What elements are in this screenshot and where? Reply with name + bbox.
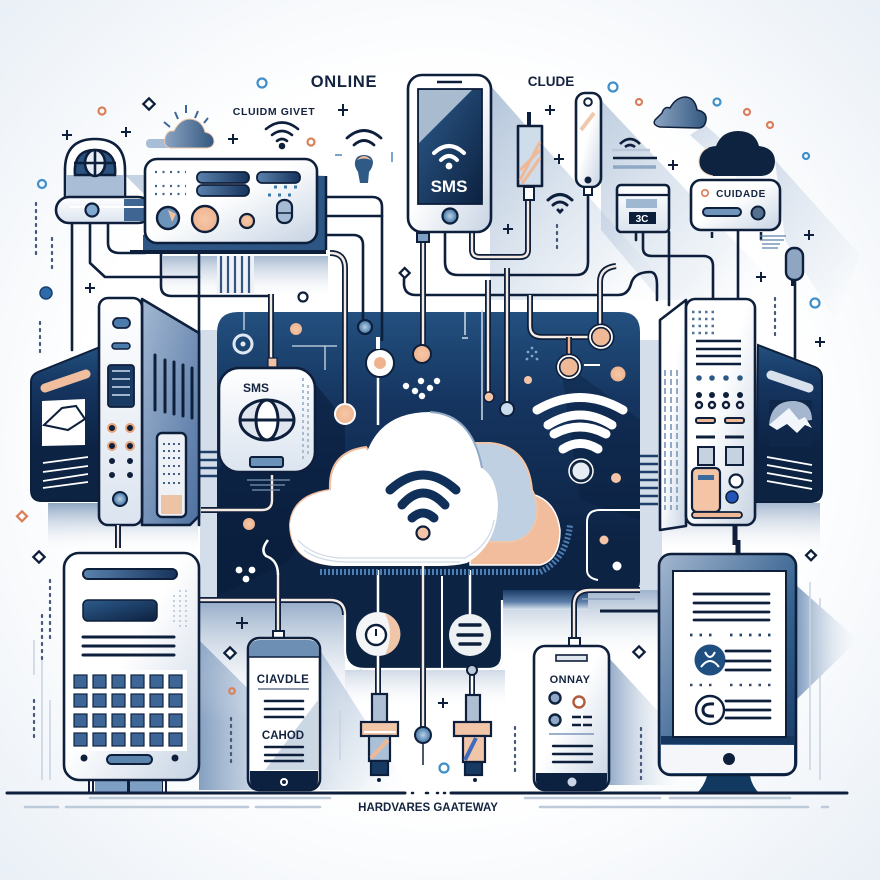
device: main phone [408,75,491,242]
cloud: blue top right [654,97,706,128]
connector: left [356,612,400,782]
decorative dotted lines [34,203,775,780]
device: monitor [659,540,796,793]
wifi icon: large white [537,398,623,483]
text: phone subheading: CAHOD [262,730,304,742]
text: CLUDE: CLUDE [528,74,574,89]
icon: globe [240,400,294,440]
cloud: blue back layer [460,443,537,542]
wifi icon: cloud [390,475,456,518]
decorative plus signs [62,104,825,708]
text: title ONLINE: ONLINE [311,73,377,91]
icon: microphone [786,248,803,286]
text: phone heading: CIAVDLE [257,674,309,686]
baseline [7,793,847,807]
cloud: central white cloud [290,412,498,566]
text: box label: CUIDADE [716,189,766,200]
cloud: peach back layer [470,493,560,565]
device: right server [660,299,755,545]
diagonal long shadows [48,85,860,790]
panel details [217,310,640,669]
device: small display box [617,185,669,232]
device: pendant [576,93,601,195]
device: keypad terminal [64,553,199,793]
icon: wifi on phone [434,146,464,167]
device: top-left globe dome [56,139,151,223]
icon: wifi bulb [335,130,392,183]
icon: monitor ring [696,696,724,724]
device: main control box [130,159,326,252]
node circles on cables [298,292,612,765]
text: phone SMS: SMS [431,177,467,196]
device: cuidade box [691,180,786,248]
cloud dotted halo [320,525,570,572]
device: left server [99,298,199,548]
device: right dark panel [756,345,822,502]
connector: right [449,614,491,782]
wires: light tubes [200,200,659,727]
text: SMS label: SMS [243,381,269,395]
text: HARDVARES GAATEWAY: HARDVARES GAATEWAY [358,802,498,814]
device: left lower phone [248,631,320,790]
faint vertical accents [34,582,820,780]
decorative rings [38,78,820,772]
panel fade lower right [503,590,588,610]
grille under box [217,256,254,293]
cloud: dark top right [699,131,775,176]
node: cloud wifi [416,526,430,540]
device: dongle [518,112,542,200]
text: phone label: ONNAY [550,674,591,686]
decorative diamonds [17,98,816,659]
icon: wifi under dongle [548,194,572,212]
icon: wifi top left [266,122,298,148]
cloud: top left with rays [146,105,214,148]
device: SMS globe box [219,358,315,490]
text: display digits: 3C [636,214,648,225]
icon: dome globe [74,150,116,176]
icon: monitor badge [694,644,726,676]
panel: central dark board [217,312,640,670]
text: CLUIDM GIVET: CLUIDM GIVET [233,106,315,118]
device: right lower phone [534,638,609,790]
icon: wifi small right [612,139,657,167]
wires: dark cables [72,195,795,525]
dot: blue [40,287,52,299]
device: left dark panel [31,347,100,501]
